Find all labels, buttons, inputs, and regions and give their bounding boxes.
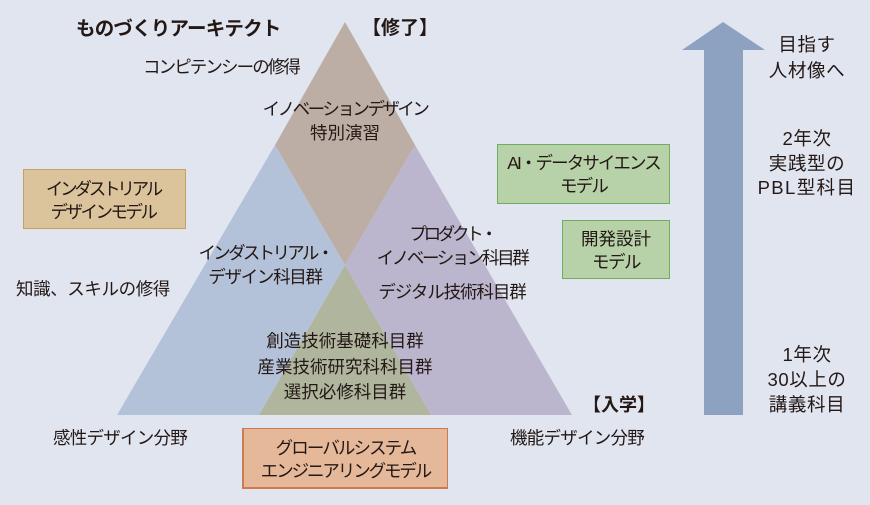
- text: industrial design courses: [198, 243, 332, 287]
- box: industrial design model: デザインモデル: [50, 202, 156, 222]
- text: industrial design courses: インダストリアル・: [198, 243, 332, 263]
- text: innovation design: [263, 99, 428, 143]
- label: kansei design field: 感性デザイン分野: [53, 428, 187, 448]
- text: innovation design: 特別演習: [310, 123, 380, 143]
- panel: product innovation region: [345, 145, 572, 415]
- box: development design model: 開発設計: [581, 229, 651, 249]
- box: industrial design model: インダストリアル: [46, 178, 160, 198]
- box: global system engineering model: エンジニアリングモデル: [261, 460, 430, 480]
- box: AI data science model: AI・データサイエンス: [507, 153, 660, 173]
- text: second year: 実践型の: [769, 152, 845, 174]
- text: foundation courses: 産業技術研究科科目群: [258, 356, 432, 376]
- label: knowledge and skills: 知識、スキルの修得: [16, 279, 170, 299]
- text: product innovation courses: イノベーション科目群: [377, 248, 527, 268]
- text: foundation courses: [258, 331, 432, 402]
- box: industrial design model: [23, 169, 186, 229]
- box: development design model: モデル: [592, 252, 640, 272]
- text: product innovation courses: プロダクト・: [409, 224, 495, 244]
- label: entrance: 【入学】: [583, 395, 655, 415]
- text: industrial design courses: デザイン科目群: [208, 267, 322, 287]
- text: target persona: [769, 34, 845, 80]
- box: development design model: [562, 220, 670, 279]
- panel: industrial design region: [117, 145, 345, 415]
- text: second year: 2年次: [782, 128, 832, 149]
- text: first year: 30以上の: [767, 369, 847, 390]
- text: product innovation courses: [377, 224, 530, 268]
- panel: foundation triangle: [259, 265, 431, 415]
- text: target persona: 目指す: [778, 34, 836, 55]
- text: first year: 講義科目: [769, 394, 845, 415]
- text: target persona: 人材像へ: [769, 60, 845, 80]
- text: foundation courses: 創造技術基礎科目群: [266, 331, 424, 351]
- label: functional design field: 機能デザイン分野: [510, 428, 644, 448]
- title: ものづくりアーキテクト: [76, 18, 281, 40]
- box: global system engineering model: グローバルシステム: [276, 438, 415, 458]
- text: digital technology courses: デジタル技術科目群: [378, 282, 526, 302]
- text: foundation courses: 選択必修科目群: [284, 382, 406, 402]
- text: first year: 1年次: [782, 344, 832, 365]
- text: innovation design: イノベーションデザイン: [263, 99, 427, 119]
- label: competency: コンピテンシーの修得: [143, 57, 299, 77]
- label: completion: 【修了】: [362, 18, 438, 39]
- icon: upward arrow: [682, 22, 765, 415]
- panel: innovation design diamond: [275, 22, 415, 265]
- text: second year: PBL型科目: [758, 177, 856, 198]
- box: global system engineering model: [242, 428, 448, 489]
- box: AI data science model: モデル: [560, 176, 607, 196]
- box: AI data science model: [497, 144, 670, 204]
- text: first year: [767, 344, 847, 415]
- text: second year: [758, 128, 856, 198]
